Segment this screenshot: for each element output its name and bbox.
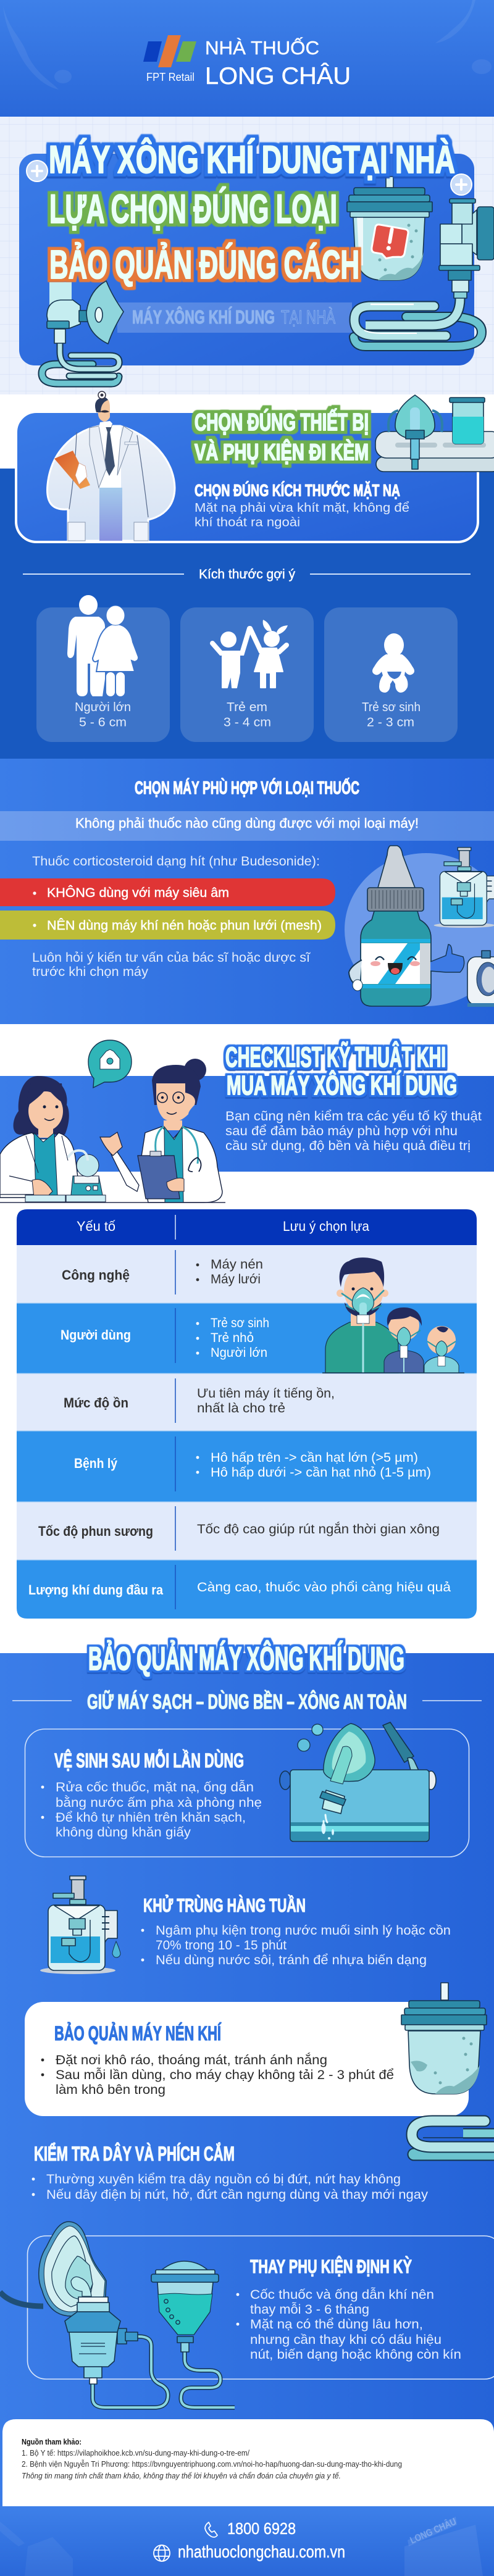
- text block: kiểm tra dây: Thường xuyên kiểm tra dây nguồn có bị đứt, nứt hay không: [46, 2172, 401, 2186]
- table: technical checklist: [17, 1209, 477, 1619]
- icon: mask and coiled tube left: [42, 281, 124, 383]
- text block: thay phụ kiện: THAY PHỤ KIỆN ĐỊNH KỲ: [250, 2255, 412, 2277]
- text block: khử trùng: 70% trong 10 - 15 phút: [156, 1938, 287, 1953]
- bottle: [378, 846, 415, 888]
- row: tốc độ phun sương: [17, 1502, 477, 1560]
- icon: phone: [205, 2522, 217, 2537]
- row: bệnh lý: Hô hấp trên -> cần hạt lớn (>5 µm): [211, 1451, 418, 1465]
- icon: plus bubble right: [451, 174, 472, 195]
- text block: khử trùng: Nếu dùng nước sôi, tránh để nhựa biến dạng: [156, 1953, 427, 1967]
- footer: [0, 2506, 494, 2576]
- panel: choose by medicine type: [0, 759, 494, 1024]
- row: bệnh lý: [17, 1431, 477, 1502]
- card: bảo quản máy nén khí: Đặt nơi khô ráo, thoáng mát, tránh ánh nắng: [56, 2053, 327, 2067]
- card: vệ sinh: Để khô tự nhiên trên khăn sạch,: [56, 1811, 246, 1825]
- father: [325, 1257, 398, 1373]
- text block: thay phụ kiện: Cốc thuốc và ống dẫn khí nên: [250, 2288, 434, 2302]
- panel: references: [2, 2419, 494, 2506]
- text block: kiểm tra dây: KIỂM TRA DÂY VÀ PHÍCH CẮM: [34, 2143, 235, 2165]
- decorative store: [404, 2516, 483, 2576]
- hero sub-bar: máy xông khí dung tại nhà: MÁY XÔNG KHÍ DUNG: [132, 306, 275, 328]
- card: người lớn: [36, 595, 170, 742]
- dark blue section background: [0, 469, 494, 759]
- panel: references: 2. Bệnh viện Nguyễn Tri Phương: https://bvnguyentriphuong.com.vn/noi-ho-hap/huong-dan-su-dung-may-tho-khi-dung: [22, 2459, 402, 2469]
- panel: references: Thông tin mang tính chất tham khảo, không thay thế lời khuyên và chẩn đoán của chuyên gia y tế.: [22, 2472, 341, 2480]
- panel: references: 1. Bộ Y tế: https://vilaphoikhoe.kcb.vn/su-dung-may-khi-dung-o-tre-em/: [22, 2449, 249, 2457]
- hero sub-bar: máy xông khí dung tại nhà: [117, 302, 352, 333]
- illustration: doctor: [48, 391, 175, 541]
- logo wordmark: Nhà Thuốc Long Châu: NHÀ THUỐC: [205, 36, 319, 59]
- card: bảo quản máy nén khí: [25, 2002, 469, 2116]
- illustration: family with masks: [322, 1257, 464, 1373]
- text block: kiểm tra dây: [32, 2143, 429, 2202]
- baby: [424, 1326, 459, 1373]
- text block: checklist intro: sau để đảm bảo máy phù hợp với nhu: [225, 1124, 458, 1138]
- card: trẻ em: 3 - 4 cm: [224, 716, 271, 730]
- nebulizer: [65, 2297, 168, 2407]
- row: mức độ ồn: [17, 1373, 477, 1431]
- row: mức độ ồn: nhất là cho trẻ: [197, 1401, 285, 1415]
- text block: khử trùng: Ngâm phụ kiện trong nước muối sinh lý hoặc cồn: [156, 1924, 451, 1938]
- illustration: two doctors: [0, 1059, 225, 1203]
- row: mức độ ồn: Mức độ ồn: [64, 1395, 128, 1411]
- card: trẻ em: Trẻ em: [227, 701, 267, 714]
- text: thuốc corticosteroid: Thuốc corticosteroid dạng hít (như Budesonide):: [32, 854, 320, 869]
- card: người lớn: Người lớn: [75, 701, 131, 714]
- text: luôn hỏi ý kiến: Luôn hỏi ý kiến tư vấn của bác sĩ hoặc dược sĩ: [32, 951, 311, 965]
- row: mức độ ồn: Ưu tiên máy ít tiếng ồn,: [197, 1386, 335, 1401]
- row: bệnh lý: Hô hấp dưới -> cần hạt nhỏ (1-5 µm): [211, 1465, 431, 1480]
- illustration: disinfect humidifier: [40, 1876, 120, 1974]
- row: người dùng: Người dùng: [61, 1327, 131, 1343]
- child: [384, 1307, 424, 1373]
- callout strip: Không phải thuốc nào cũng dùng được với mọi loại máy!: [75, 815, 419, 831]
- card: vệ sinh: bằng nước ấm pha xà phòng nhẹ: [56, 1796, 262, 1810]
- text block: khử trùng: KHỬ TRÙNG HÀNG TUẦN: [143, 1894, 306, 1916]
- card outline: thay phụ kiện: [27, 2236, 494, 2379]
- icon: plus bubble left: [27, 160, 48, 181]
- text block: checklist intro: cầu sử dụng, độ bền và hiệu quả điều trị: [225, 1139, 471, 1153]
- text block: mask size: Mặt nạ phải vừa khít mặt, không để: [195, 501, 409, 515]
- row: công nghệ: Công nghệ: [62, 1267, 130, 1283]
- row: tốc độ phun sương: Tốc độ cao giúp rút ngắn thời gian xông: [197, 1522, 440, 1536]
- card: trẻ em: [180, 607, 314, 742]
- icon: T-connector and coiled tube right: [354, 199, 494, 346]
- icon: baby: [372, 633, 414, 693]
- left doctor: [0, 1076, 80, 1198]
- row: lượng khí dung đầu ra: Lượng khí dung đầu ra: [28, 1582, 164, 1598]
- text block: khử trùng: [141, 1894, 451, 1967]
- table header: Yếu tố: [77, 1219, 115, 1234]
- card: vệ sinh: VỆ SINH SAU MỖI LẦN DÙNG: [54, 1749, 244, 1772]
- row: người dùng: [17, 1303, 477, 1373]
- card: bảo quản máy nén khí: BẢO QUẢN MÁY NÉN KHÍ: [54, 2022, 222, 2045]
- row: công nghệ: Máy lưới: [211, 1272, 261, 1286]
- illustration: mask, nebulizer, cup: [0, 2222, 235, 2407]
- medicine cup: [151, 2261, 235, 2407]
- text block: mask size: [195, 480, 409, 530]
- heading: kích thước gợi ý: Kích thước gợi ý: [199, 567, 295, 581]
- right doctor: [100, 1059, 222, 1203]
- title: hero three lines: [49, 138, 455, 287]
- icon: speech bubble: [88, 1040, 132, 1088]
- warning bar: không dùng: KHÔNG dùng với máy siêu âm: [47, 886, 229, 900]
- row: lượng khí dung đầu ra: [17, 1560, 477, 1619]
- text block: thay phụ kiện: Mặt nạ có thể dùng lâu hơn,: [250, 2317, 423, 2332]
- mask: [39, 2222, 106, 2316]
- text block: kiểm tra dây: Nếu dây điện bị nứt, hở, đứt cần ngưng dùng và thay mới ngay: [46, 2188, 429, 2202]
- website: nhathuoclongchau.com.vn: [178, 2542, 345, 2561]
- icon: globe: [154, 2545, 170, 2561]
- card: trẻ sơ sinh: 2 - 3 cm: [367, 716, 414, 730]
- text block: thay phụ kiện: nhưng cần thay khi có dấu hiệu: [250, 2333, 442, 2347]
- card: bảo quản máy nén khí: làm khô bên trong: [56, 2083, 165, 2097]
- text block: mask size: CHỌN ĐÚNG KÍCH THƯỚC MẶT NẠ: [195, 480, 400, 500]
- panel: storage section background: [0, 1653, 494, 2506]
- card: vệ sinh: không dùng khăn giấy: [56, 1825, 191, 1840]
- row: người dùng: Trẻ nhỏ: [211, 1331, 254, 1345]
- row: công nghệ: Máy nén: [211, 1257, 263, 1272]
- warning bar: không dùng: [0, 878, 335, 906]
- row: người dùng: Trẻ sơ sinh: [211, 1316, 269, 1330]
- heading: chọn đúng thiết bị: CHỌN ĐÚNG THIẾT BỊ: [195, 409, 369, 436]
- table header: Lưu ý chọn lựa: [283, 1219, 370, 1234]
- icon: nebulizer cup with warning: [347, 177, 432, 280]
- callout strip: [0, 811, 494, 841]
- nebulizer machine: [25, 1151, 106, 1202]
- illustration: mascot bottle and machines: [345, 846, 494, 1007]
- phone number: 1800 6928: [227, 2519, 296, 2538]
- card: vệ sinh: [25, 1729, 469, 1857]
- panel: references: Nguồn tham khảo:: [22, 2437, 82, 2446]
- card: vệ sinh: Rửa cốc thuốc, mặt nạ, ống dẫn: [56, 1780, 254, 1794]
- icon: warning badge: [371, 224, 409, 261]
- icon: children: [212, 620, 288, 688]
- card: trẻ sơ sinh: [324, 607, 458, 742]
- table header: [17, 1209, 477, 1245]
- logo wordmark: Nhà Thuốc Long Châu: LONG CHÂU: [205, 63, 351, 90]
- heading: chọn đúng thiết bị: [195, 409, 369, 465]
- compressor: [467, 957, 494, 1005]
- text: luôn hỏi ý kiến: [32, 951, 311, 979]
- illustration: mask on towel: [280, 1722, 436, 1841]
- text block: checklist intro: [225, 1109, 482, 1153]
- hero sub-bar: máy xông khí dung tại nhà: TẠI NHÀ: [281, 306, 335, 328]
- row: bệnh lý: Bệnh lý: [74, 1456, 118, 1471]
- grid background: [0, 117, 494, 394]
- card: trẻ sơ sinh: Trẻ sơ sinh: [362, 701, 421, 714]
- row: lượng khí dung đầu ra: Càng cao, thuốc vào phổi càng hiệu quả: [197, 1580, 451, 1594]
- card: người lớn: 5 - 6 cm: [79, 716, 127, 730]
- row: tốc độ phun sương: Tốc độ phun sương: [38, 1524, 153, 1539]
- heading: chọn đúng thiết bị: VÀ PHỤ KIỆN ĐI KÈM: [195, 439, 369, 465]
- panel: choose device: [16, 412, 478, 542]
- logo: FPT Retail: [143, 35, 196, 83]
- tube to mask: [0, 2292, 43, 2306]
- text block: thay phụ kiện: nút, biến dạng hoặc không còn kín: [250, 2348, 461, 2362]
- text block: mask size: khí thoát ra ngoài: [195, 516, 300, 530]
- recommend bar: nên dùng: NÊN dùng máy khí nén hoặc phun lưới (mesh): [47, 919, 322, 933]
- panel: checklist banner: [0, 1076, 494, 1172]
- icon: adults: [67, 595, 138, 696]
- title line: lựa chọn đúng loại: LỰA CHỌN ĐÚNG LOẠI: [49, 186, 337, 231]
- row: công nghệ: [17, 1245, 477, 1303]
- text block: checklist intro: Bạn cũng nên kiểm tra các yếu tố kỹ thuật: [225, 1109, 482, 1123]
- panel: hero: [19, 154, 474, 365]
- heading: checklist: [225, 1041, 457, 1101]
- recommend bar: nên dùng: [0, 911, 335, 940]
- humidifier: [434, 848, 494, 928]
- text: luôn hỏi ý kiến: trước khi chọn máy: [32, 965, 149, 979]
- decorative store: LONG CHÂU: [408, 2516, 458, 2546]
- heading: chọn máy phù hợp: CHỌN MÁY PHÙ HỢP VỚI LOẠI THUỐC: [135, 777, 359, 798]
- illustration: cup and coiled tube: [401, 1983, 494, 2154]
- logo wordmark: Nhà Thuốc Long Châu: [205, 36, 351, 90]
- text block: thay phụ kiện: [237, 2255, 461, 2362]
- illustration: mask and cup on pad: [375, 395, 494, 472]
- header band: [0, 0, 494, 117]
- logo: FPT Retail: FPT Retail: [146, 71, 195, 83]
- card: bảo quản máy nén khí: Sau mỗi lần dùng, cho máy chạy không tải 2 - 3 phút để: [56, 2068, 394, 2082]
- text block: thay phụ kiện: thay mỗi 3 - 6 tháng: [250, 2303, 369, 2317]
- row: người dùng: Người lớn: [211, 1346, 267, 1360]
